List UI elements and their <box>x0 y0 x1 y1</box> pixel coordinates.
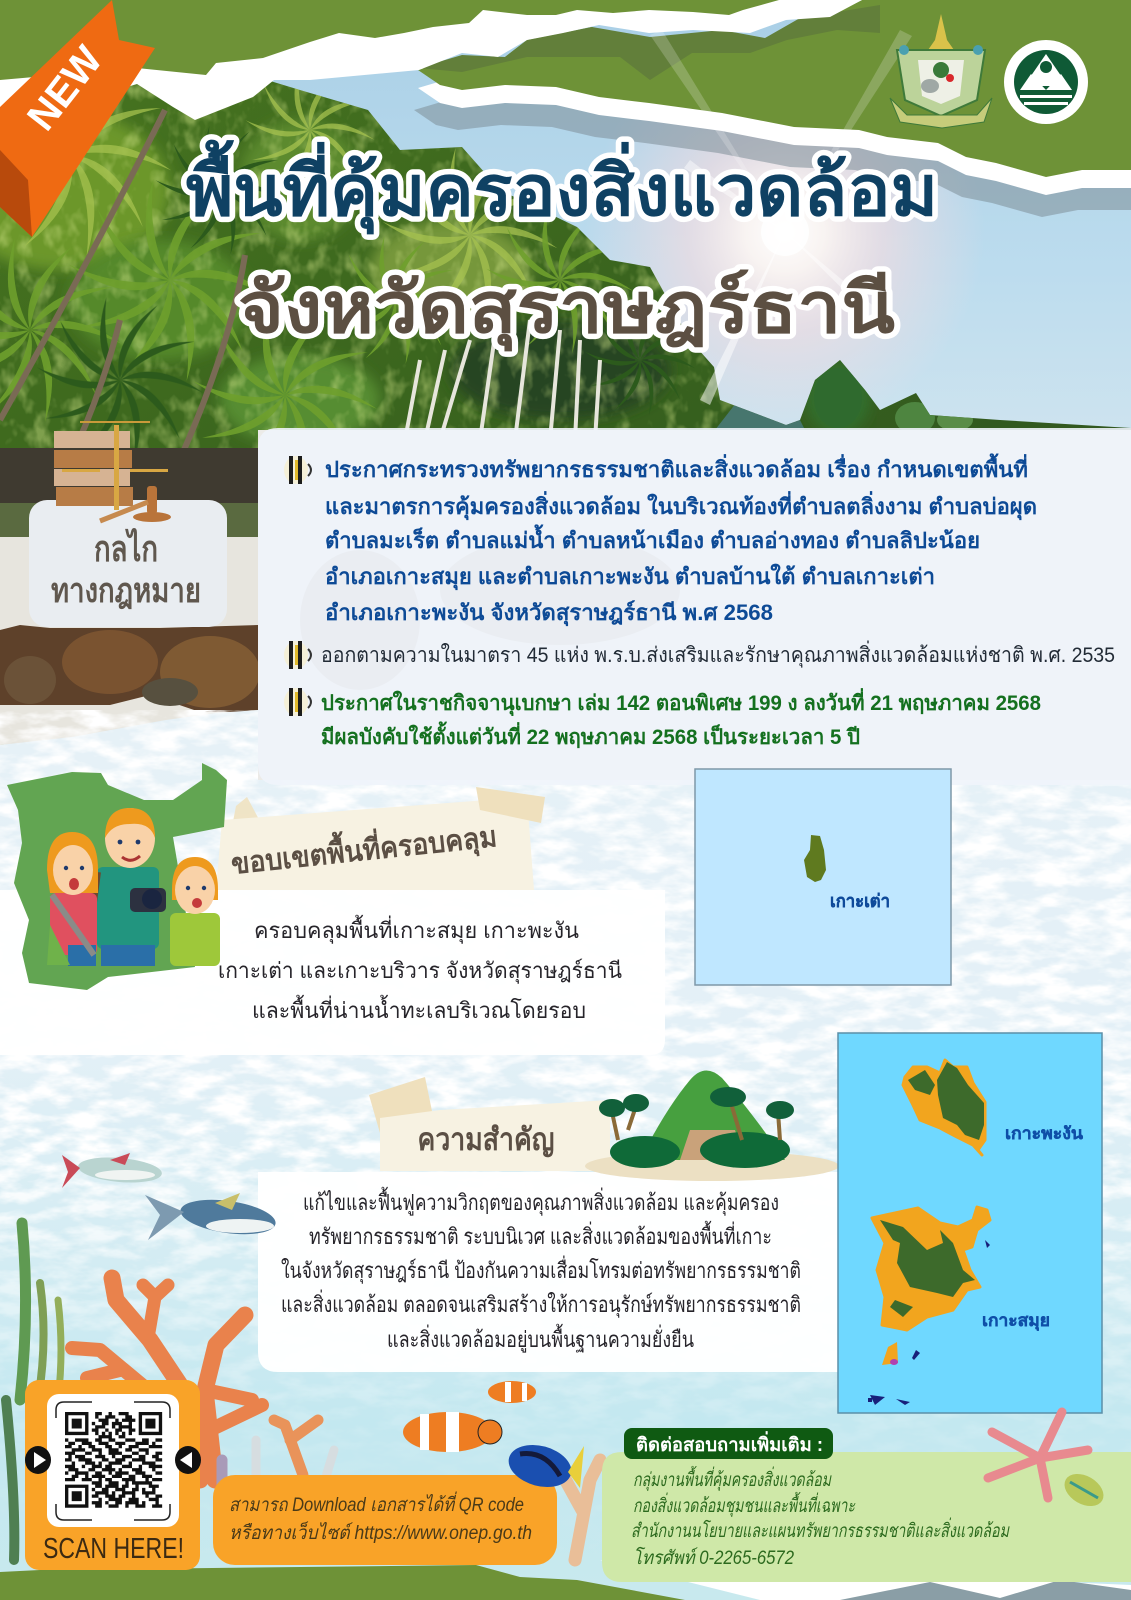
bullet: fish 1 <box>284 456 311 484</box>
fish: blue tuna <box>145 1193 278 1240</box>
fish: small clownfish <box>488 1381 536 1403</box>
icon: right arrow marker <box>175 1446 201 1474</box>
panel: top left white edge <box>0 0 862 125</box>
label box: legal mechanism: กลไก <box>94 527 158 569</box>
panel: importance text <box>258 1172 838 1372</box>
panel: coverage text: และพื้นที่น่านน้ำทะเลบริเวณโดยรอบ <box>252 995 586 1023</box>
legal text: announcement <box>325 453 1037 627</box>
panel: QR code card <box>25 1380 200 1570</box>
panel: contact details: โทรศัพท์ 0-2265-6572 <box>633 1546 794 1569</box>
background: palm forest <box>0 54 1131 760</box>
QR code <box>65 1412 162 1508</box>
panel: download note: สามารถ Download เอกสารได้ที่ QR code <box>229 1491 524 1516</box>
title line 1: พื้นที่คุ้มครองสิ่งแวดล้อม <box>186 139 938 235</box>
ribbon: NEW <box>0 0 155 237</box>
background: sea water texture <box>0 710 1131 1600</box>
contact header: ติดต่อสอบถามเพิ่มเติม : <box>636 1431 823 1456</box>
icon: starfish <box>988 1412 1088 1498</box>
map label: Koh Samui: เกาะสมุย <box>982 1311 1050 1331</box>
legal text: gazette: มีผลบังคับใช้ตั้งแต่วันที่ 22 พฤษภาคม 2568 เป็นระยะเวลา 5 ปี <box>321 721 860 749</box>
bullet: fish 2 <box>284 641 311 669</box>
legal text: announcement: ตำบลมะเร็ต ตำบลแม่น้ำ ตำบลหน้าเมือง ตำบลอ่างทอง ตำบลลิปะน้อย <box>325 524 980 553</box>
person: child <box>170 857 220 966</box>
seaweed <box>6 1223 61 1560</box>
illustration: small island <box>585 1070 839 1181</box>
background: sun glow <box>585 32 985 432</box>
legal text: gazette <box>321 687 1041 749</box>
heading: coverage area: ขอบเขตพื้นที่ครอบคลุม <box>229 814 499 882</box>
panel: importance text: และสิ่งแวดล้อมอยู่บนพื้นฐานความยั่งยืน <box>387 1324 694 1353</box>
background: beach rocks behind legal panel <box>258 430 1131 780</box>
panel: top green dark crest <box>418 5 880 80</box>
background: beach sand <box>0 537 258 745</box>
background: brown rocks <box>0 625 260 712</box>
panel: download note <box>213 1475 557 1565</box>
panel: contact details: กลุ่มงานพื้นที่คุ้มครองสิ่งแวดล้อม <box>633 1465 832 1491</box>
icon: shell <box>1059 1467 1109 1513</box>
panel: top torn paper white edge <box>418 18 1131 195</box>
panel: top torn paper shadow <box>414 40 1131 217</box>
icon: green map silhouette <box>7 763 227 990</box>
fish: clownfish <box>403 1412 502 1452</box>
island: Koh Samui <box>872 1207 990 1330</box>
map: Koh Tao: เกาะเต่า <box>830 891 890 911</box>
illustration: family of tourists <box>47 808 220 966</box>
panel: top left green band <box>0 0 779 80</box>
ribbon: NEW: NEW <box>19 38 111 139</box>
title line 2: จังหวัดสุราษฎร์ธานี <box>238 269 895 352</box>
map label: Koh Phangan: เกาะพะงัน <box>1005 1124 1083 1143</box>
island: Koh Taen and islets <box>868 1240 990 1405</box>
person: father <box>88 808 166 966</box>
panel: contact details: สำนักงานนโยบายและแผนทรัพยากรธรรมชาติและสิ่งแวดล้อม <box>631 1517 1010 1542</box>
panel: importance text: ทรัพยากรธรรมชาติ ระบบนิเวศ และสิ่งแวดล้อมของพื้นที่เกาะ <box>309 1221 772 1249</box>
legal text: announcement: และมาตรการคุ้มครองสิ่งแวดล้อม ในบริเวณท้องที่ตำบลตลิ่งงาม ตำบลบ่อผุด <box>325 490 1037 521</box>
sun rays <box>650 30 912 405</box>
panel: legal information <box>258 428 1131 785</box>
panel: importance text: แก้ไขและฟื้นฟูความวิกฤตของคุณภาพสิ่งแวดล้อม และคุ้มครอง <box>303 1187 779 1216</box>
background: stone wall <box>0 448 258 503</box>
fish: silver tuna top <box>62 1153 163 1188</box>
panel: importance text: ในจังหวัดสุราษฎร์ธานี ป้องกันความเสื่อมโทรมต่อทรัพยากรธรรมชาติ <box>281 1255 801 1284</box>
heading: importance <box>369 1077 610 1171</box>
QR frame corners <box>56 1402 170 1520</box>
background: shore vegetation strip <box>0 503 258 537</box>
map: Koh Phangan and Koh Samui <box>838 1033 1102 1413</box>
logo: ONEP round seal <box>1004 40 1088 124</box>
text: scan here: SCAN HERE! <box>43 1533 184 1565</box>
island: Koh Phangan <box>903 1060 985 1155</box>
person: mother <box>47 832 98 966</box>
fish: blue tang <box>504 1438 584 1494</box>
panel: coverage text <box>0 890 665 1055</box>
contact header <box>624 1428 833 1459</box>
panel: coverage text: เกาะเต่า และเกาะบริวาร จังหวัดสุราษฎร์ธานี <box>218 958 622 984</box>
coral: orange <box>72 1278 600 1560</box>
panel: importance text: และสิ่งแวดล้อม ตลอดจนเสริมสร้างให้การอนุรักษ์ทรัพยากรธรรมชาติ <box>281 1289 801 1318</box>
legal text: announcement: อำเภอเกาะพะงัน จังหวัดสุราษฎร์ธานี พ.ศ 2568 <box>325 600 773 627</box>
legal text: announcement: อำเภอเกาะสมุย และตำบลเกาะพะงัน ตำบลบ้านใต้ ตำบลเกาะเต่า <box>325 563 935 591</box>
coral: purple tubes <box>222 1440 334 1500</box>
panel: top right green band <box>418 0 1131 177</box>
panel: contact details: กองสิ่งแวดล้อมชุมชนและพื้นที่เฉพาะ <box>633 1491 856 1517</box>
icon: left arrow marker <box>25 1446 51 1474</box>
heading: importance: ความสำคัญ <box>418 1122 554 1158</box>
map: Koh Tao <box>695 769 951 985</box>
panel: coverage text: ครอบคลุมพื้นที่เกาะสมุย เกาะพะงัน <box>254 915 579 944</box>
bottom green torn band <box>0 1560 1131 1600</box>
icon: law books, scales and gavel <box>54 421 171 522</box>
background: sky <box>0 0 1131 450</box>
bullet: fish 3 <box>284 688 311 716</box>
label box: legal mechanism: ทางกฎหมาย <box>51 572 201 610</box>
label box: legal mechanism <box>29 500 227 627</box>
panel: contact details <box>602 1428 1131 1582</box>
panel: download note: หรือทางเว็บไซต์ https://www.onep.go.th <box>229 1521 532 1544</box>
heading: coverage area <box>216 787 545 890</box>
legal text: announcement: ประกาศกระทรวงทรัพยากรธรรมชาติและสิ่งแวดล้อม เรื่อง กำหนดเขตพื้นที่ <box>325 453 1028 482</box>
logo: provincial seal <box>890 14 992 128</box>
legal text: gazette: ประกาศในราชกิจจานุเบกษา เล่ม 142 ตอนพิเศษ 199 ง ลงวันที่ 21 พฤษภาคม 2568 <box>321 687 1041 717</box>
